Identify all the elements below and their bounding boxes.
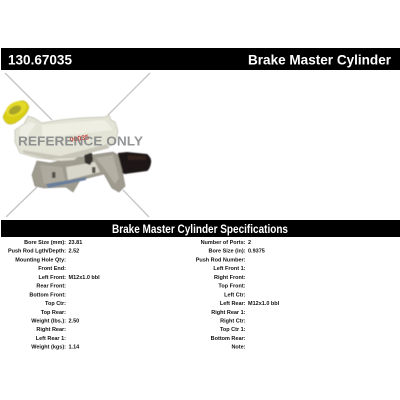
specifications left column: 23.81 [68,240,82,246]
specifications header bar [1,220,400,237]
specifications right column: Top Front: [218,284,246,290]
specifications right column: Left Front 1: [213,266,246,272]
specifications left column: Weight (kgs): [31,345,66,351]
specifications right column: Number of Ports: [201,240,246,246]
product title: Brake Master Cylinder [248,52,392,68]
specifications right column: Note: [231,345,246,351]
specifications left column: 2.52 [68,249,79,255]
specifications right column: 2 [248,240,251,246]
specifications left column: Weight (lbs.): [31,318,66,324]
specifications title: Brake Master Cylinder Specifications [112,222,288,236]
specifications left column: Bottom Front: [29,292,66,298]
specifications left column [8,240,100,351]
specifications right column: M12x1.0 bbl [248,301,280,307]
specifications left column: Front End: [38,266,66,272]
specifications right column: Right Ctr: [220,318,246,324]
specifications left column: Right Rear: [36,327,66,333]
reference only watermark: REFERENCE ONLY [18,134,143,148]
specifications left column: Top Rear: [41,310,66,316]
specifications left column: Mounting Hole Qty: [15,257,66,263]
watermark cross lines [5,73,150,217]
specifications left column: 1.14 [68,345,80,351]
icon: metal housing [32,152,125,192]
header bar [1,48,400,70]
specifications left column: Rear Front: [36,284,66,290]
specifications right column: Top Ctr 1: [220,327,246,333]
specifications right column: Bore Size (in): [209,249,246,255]
specifications left column: Left Front: [38,275,66,281]
specifications left column: Top Ctr: [45,301,66,307]
specifications left column: Bore Size (mm): [24,240,66,246]
icon: yellow reservoir cap [3,98,29,124]
specifications left column: Left Rear 1: [36,336,66,342]
specifications left column: Push Rod Lgth/Depth: [8,249,66,255]
specifications left column: M12x1.0 bbl [68,275,100,281]
icon: white fluid reservoir [15,115,118,161]
specifications right column: Left Ctr: [224,292,246,298]
specifications right column: Bottom Rear: [211,336,246,342]
part marking: 00035 [69,134,90,144]
specifications right column: Right Rear 1: [211,310,246,316]
part number: 130.67035 [8,52,72,68]
icon: black pushrod cylinder [118,152,151,174]
specifications right column: Left Rear: [220,301,246,307]
specifications right column [196,240,280,351]
specifications right column: Right Front: [214,275,246,281]
specifications right column: 0.9375 [248,249,265,255]
product photo: brake master cylinder [3,98,151,192]
specifications left column: 2.50 [68,318,79,324]
specifications right column: Push Rod Number: [196,257,246,263]
